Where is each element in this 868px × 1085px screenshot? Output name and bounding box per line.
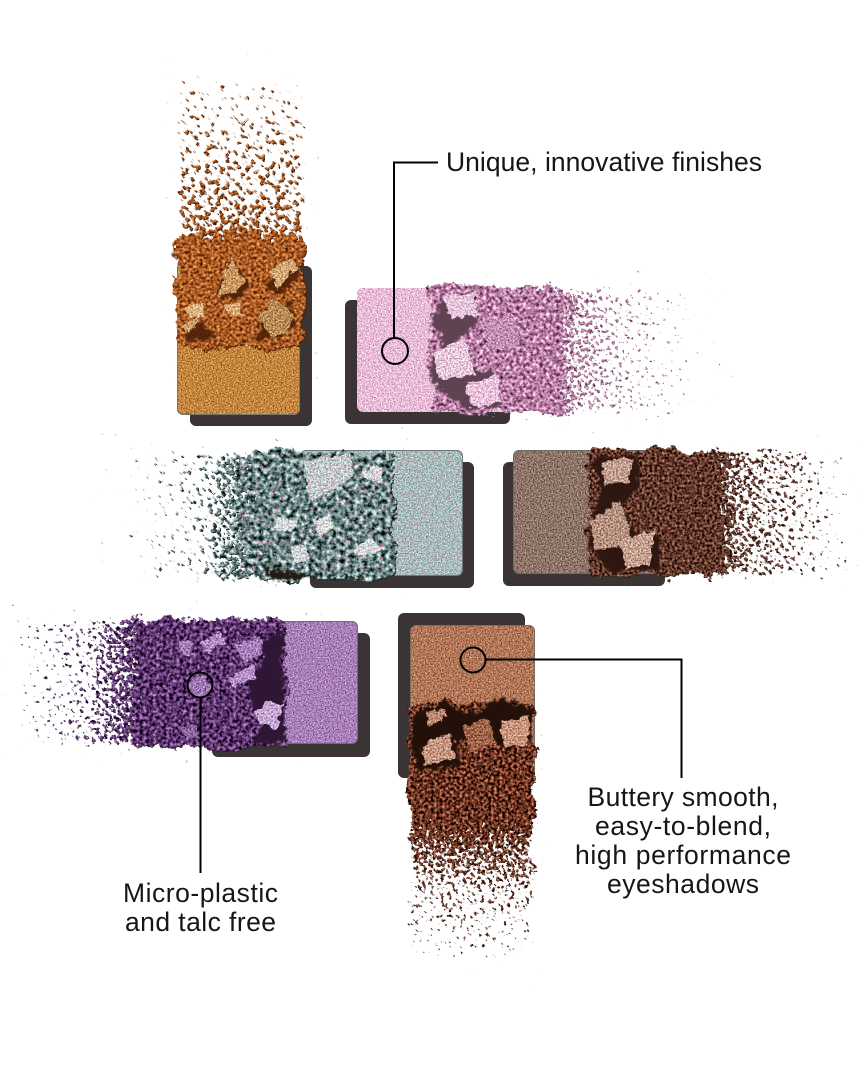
text: buttery: high performance	[575, 840, 791, 870]
marker: buttery circle	[460, 648, 486, 672]
text: buttery: easy-to-blend,	[595, 811, 771, 841]
swatch: taupe brown eyeshadow	[503, 450, 845, 586]
swatch: gold eyeshadow	[177, 82, 312, 426]
text: micro-plastic: Micro-plastic	[123, 878, 278, 908]
callout: buttery smooth	[460, 648, 791, 899]
marker: micro-plastic circle	[188, 672, 212, 698]
text: buttery: Buttery smooth,	[588, 782, 778, 812]
swatch: teal sparkle eyeshadow	[132, 450, 474, 588]
text: micro-plastic: and talc free	[125, 907, 276, 937]
swatch: copper eyeshadow	[398, 613, 535, 958]
swatch: pink eyeshadow	[345, 288, 692, 424]
callout: unique finishes	[382, 147, 762, 364]
leader line: finishes	[394, 162, 438, 338]
text: buttery: eyeshadows	[607, 869, 759, 899]
text: finishes: Unique, innovative finishes	[446, 147, 762, 177]
marker: finishes circle	[382, 338, 408, 364]
callout: micro-plastic free	[123, 672, 278, 937]
swatch: purple eyeshadow	[22, 620, 370, 757]
leader line: micro-plastic	[200, 698, 202, 873]
leader line: buttery	[486, 660, 682, 778]
